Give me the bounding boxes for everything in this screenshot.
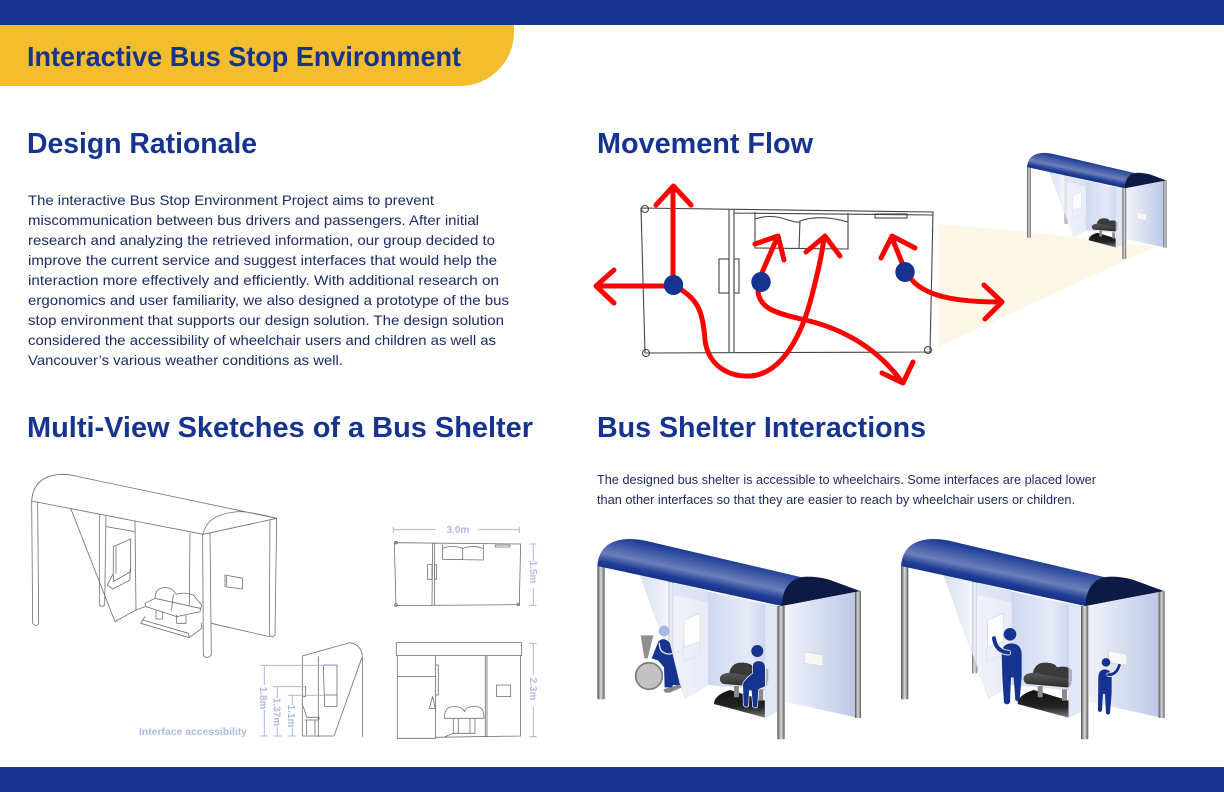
- text block: design rationale: improve the current service and suggest interfaces that would help the: [28, 252, 497, 268]
- text block: design rationale: Vancouver’s various weather conditions as well.: [28, 352, 343, 368]
- text block: design rationale: [28, 192, 509, 368]
- heading: movement flow: Movement Flow: [597, 128, 814, 160]
- floor plan sketch: [641, 206, 933, 356]
- wheelchair: [636, 635, 682, 693]
- heading: multi-view sketches: Multi-View Sketches of a Bus Shelter: [27, 412, 533, 444]
- front view sketch: [396, 643, 537, 738]
- text block: design rationale: The interactive Bus Stop Environment Project aims to prevent: [28, 192, 434, 208]
- wheelchair user: [652, 626, 681, 687]
- dimension labels: 1.8m: [257, 687, 268, 710]
- child at wall interface: [1098, 658, 1119, 715]
- text block: design rationale: research and analyzing the retrieved information, our group decided to: [28, 232, 495, 248]
- movement arrows: [596, 186, 1002, 383]
- adult at kiosk: [994, 628, 1022, 704]
- start dot: left: [664, 275, 683, 295]
- dimension labels: 3.0m: [447, 525, 470, 536]
- perspective sketch of shelter: [32, 474, 277, 657]
- text block: interactions: The designed bus shelter is accessible to wheelchairs. Some interfaces are placed lower: [597, 473, 1096, 487]
- text block: interactions: [597, 473, 1096, 507]
- start dot: right: [895, 262, 915, 282]
- top band: [0, 0, 1224, 25]
- text block: interactions: than other interfaces so that they are easier to reach by wheelchair users or children.: [597, 493, 1075, 507]
- illustration: wheelchair user and seated person: [597, 539, 861, 739]
- dimension labels: 1.5m: [527, 561, 538, 584]
- text block: design rationale: stop environment that supports our design solution. The design solution: [28, 312, 504, 328]
- title banner: [0, 25, 514, 86]
- illustration: standing adult and child: [901, 539, 1165, 739]
- dimension labels: 1.37m: [270, 698, 282, 726]
- dimension labels: [257, 525, 538, 728]
- caption: interface accessibility: Interface accessibility: [139, 726, 247, 738]
- text block: design rationale: interaction more effectively and efficiently. With additional research on: [28, 272, 499, 288]
- heading: bus shelter interactions: Bus Shelter Interactions: [597, 412, 926, 444]
- bottom band: [0, 767, 1224, 792]
- seated person: [743, 645, 765, 708]
- dimension labels: 1.1m: [285, 705, 296, 728]
- interface on right wall: [1108, 651, 1127, 665]
- text block: design rationale: considered the accessibility of wheelchair users and children as well as: [28, 332, 496, 348]
- heading: design rationale: Design Rationale: [27, 128, 257, 160]
- title: Interactive Bus Stop Environment: [27, 41, 461, 72]
- dimension labels: 2.3m: [527, 678, 538, 701]
- light cone to shelter: [938, 224, 1155, 347]
- text block: design rationale: ergonomics and user familiarity, we also designed a prototype of the bus: [28, 292, 509, 308]
- mini bus shelter: [1027, 153, 1167, 259]
- top view sketch: [393, 527, 537, 606]
- start dot: middle: [751, 272, 771, 292]
- side view sketch: [260, 643, 363, 737]
- text block: design rationale: miscommunication between bus drivers and passengers. After initial: [28, 212, 479, 228]
